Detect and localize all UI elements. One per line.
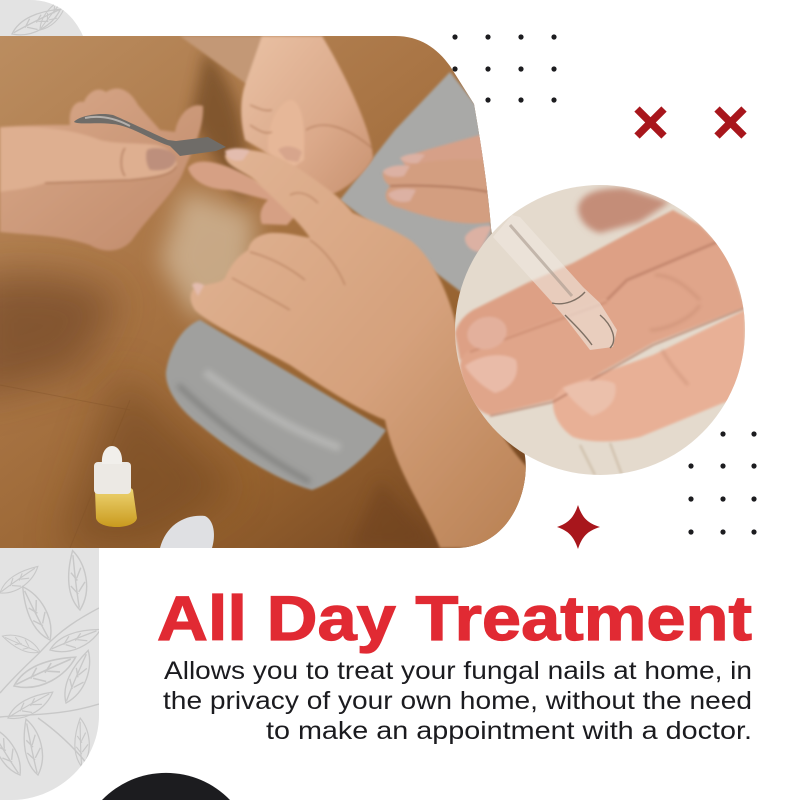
cotton pad	[160, 516, 214, 548]
back finger	[578, 188, 670, 233]
body text: Allows you to treat your fungal nails at home, in	[164, 657, 752, 685]
dots: top grid	[452, 34, 557, 103]
hand: left hand holding nipper	[0, 88, 203, 251]
dots: bottom grid	[688, 431, 757, 535]
body text: to make an appointment with a doctor.	[266, 717, 752, 745]
title: All Day Treatment	[157, 584, 752, 654]
body text	[163, 657, 752, 745]
bottom finger	[553, 310, 745, 442]
nipper tool	[74, 114, 226, 156]
decorative black semicircle	[102, 773, 230, 800]
top finger	[455, 210, 717, 360]
panel: top-left leaf pattern	[0, 0, 90, 37]
hand: client hand with extended finger	[191, 148, 530, 548]
main photo: hands and nail care	[0, 36, 540, 548]
dropper	[493, 215, 617, 350]
icon: red crosses	[637, 109, 744, 136]
body text: the privacy of your own home, without the need	[163, 687, 752, 715]
wood table	[0, 36, 540, 548]
towel	[166, 72, 492, 490]
oil bottle	[94, 446, 137, 527]
nails	[467, 316, 507, 350]
circular inset: dropper on nails	[455, 185, 745, 475]
middle finger	[460, 240, 745, 415]
hand: upper hand holding finger	[180, 36, 373, 225]
hand: right fingers on towel	[383, 135, 492, 252]
icon: red star	[557, 505, 600, 549]
panel: bottom-left leaf pattern	[0, 548, 103, 800]
